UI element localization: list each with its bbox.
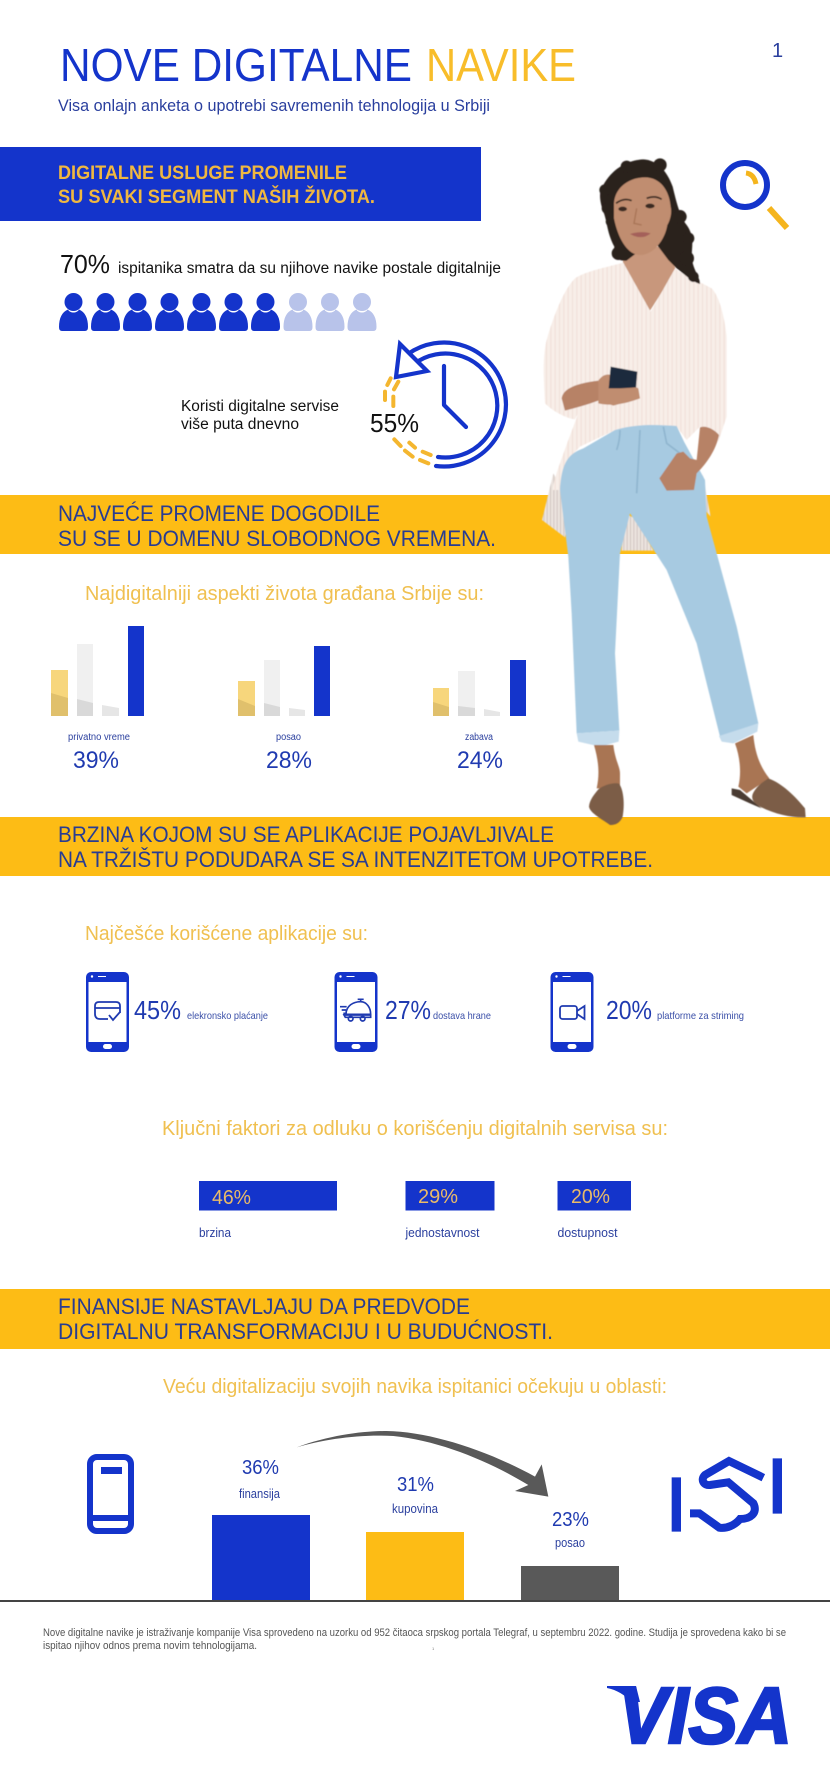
page number: 1 bbox=[772, 40, 783, 62]
right leg bbox=[735, 735, 769, 793]
title: NOVE DIGITALNE bbox=[60, 39, 412, 91]
bar: posao: 23% bbox=[552, 1508, 589, 1531]
bar chart: zabava bbox=[433, 660, 526, 774]
left arm and hand bbox=[562, 381, 600, 411]
app stat: food delivery bbox=[334, 972, 491, 1052]
app stat: streaming: platforme za striming bbox=[657, 1010, 744, 1022]
footnote bbox=[43, 1627, 786, 1652]
right shoe bbox=[752, 778, 806, 817]
bar chart: privatno vreme: 39% bbox=[73, 747, 119, 774]
factor bar: brzina: 46% bbox=[212, 1187, 251, 1209]
app stat: streaming: 20% bbox=[606, 995, 652, 1025]
left leg bbox=[594, 745, 620, 788]
arrow: curved grey bbox=[297, 1431, 548, 1497]
bar: finansija: finansija bbox=[239, 1486, 281, 1501]
bar: kupovina: 31% bbox=[397, 1473, 434, 1496]
axis line bbox=[0, 1600, 830, 1602]
factor bar: dostupnost bbox=[558, 1181, 631, 1240]
stat: 70 percent bbox=[60, 249, 501, 279]
phone bbox=[609, 367, 637, 388]
bar: kupovina: kupovina bbox=[392, 1501, 439, 1516]
icon: handshake bbox=[676, 1458, 777, 1532]
neck bbox=[623, 247, 676, 312]
hair bbox=[599, 158, 700, 284]
bar chart: zabava: zabava bbox=[465, 732, 493, 743]
panel: blue banner bbox=[0, 147, 481, 221]
bar: kupovina bbox=[366, 1473, 464, 1600]
panel: yellow banner 2: BRZINA KOJOM SU SE APLIKACIJE POJAVLJIVALE bbox=[58, 822, 554, 847]
bar chart: posao bbox=[238, 646, 330, 774]
bar chart: zabava: 24% bbox=[457, 747, 503, 774]
icon: phone outline bbox=[90, 1457, 131, 1531]
right shoe sole bbox=[732, 788, 762, 808]
stat: 70 percent: 70% bbox=[60, 249, 110, 279]
jeans cuffs bbox=[577, 731, 619, 747]
panel: yellow banner 2 bbox=[0, 817, 830, 876]
panel: yellow banner 3: DIGITALNU TRANSFORMACIJU I U BUDUĆNOSTI. bbox=[58, 1319, 553, 1344]
factor bar: dostupnost: dostupnost bbox=[558, 1225, 618, 1240]
jeans bbox=[560, 425, 758, 737]
panel: yellow banner 3 bbox=[0, 1289, 830, 1349]
factor bar: brzina bbox=[199, 1181, 337, 1240]
icon: clock with arrow bbox=[385, 343, 506, 467]
app stat: food delivery: dostava hrane bbox=[433, 1010, 491, 1022]
panel: yellow banner 1: NAJVEĆE PROMENE DOGODILE bbox=[58, 501, 380, 526]
bar: finansija bbox=[212, 1456, 310, 1600]
stat: 55 percent: 55% bbox=[370, 408, 419, 438]
app stat: electronic payment: 45% bbox=[134, 995, 181, 1025]
heading: expectations: Veću digitalizaciju svojih navika ispitanici očekuju u oblasti: bbox=[163, 1376, 667, 1398]
bar chart: posao: posao bbox=[276, 732, 301, 743]
heading: most digital aspects: Najdigitalniji aspekti života građana Srbije su: bbox=[85, 583, 484, 605]
bar chart: privatno vreme: privatno vreme bbox=[68, 732, 130, 743]
panel: blue banner: SU SVAKI SEGMENT NAŠIH ŽIVOTA. bbox=[58, 184, 375, 208]
illustration: woman with phone bbox=[542, 158, 806, 825]
panel: yellow banner 1: SU SE U DOMENU SLOBODNOG VREMENA. bbox=[58, 526, 496, 551]
subtitle: Visa onlajn anketa o upotrebi savremenih tehnologija u Srbiji bbox=[58, 97, 490, 115]
shirt bbox=[544, 263, 727, 490]
bar: finansija: 36% bbox=[242, 1456, 279, 1479]
app stat: electronic payment: elekronsko plaćanje bbox=[187, 1010, 268, 1022]
factor bar: jednostavnost: jednostavnost bbox=[405, 1225, 480, 1240]
bar: posao bbox=[521, 1508, 619, 1600]
factor bar: jednostavnost: 29% bbox=[418, 1186, 458, 1208]
bar chart: privatno vreme bbox=[51, 626, 144, 774]
factor bar: dostupnost: 20% bbox=[571, 1186, 610, 1208]
icon: magnifier bbox=[723, 163, 787, 228]
panel: blue banner: DIGITALNE USLUGE PROMENILE bbox=[58, 162, 347, 184]
text: daily use bbox=[181, 398, 339, 433]
heading: most used apps: Najčešće korišćene aplikacije su: bbox=[85, 923, 368, 945]
bar: posao: posao bbox=[555, 1535, 585, 1550]
text: daily use: Koristi digitalne servise bbox=[181, 398, 339, 415]
right arm and hand bbox=[659, 427, 719, 491]
footnote: ispitao njihov odnos prema novim tehnologijama. bbox=[43, 1640, 257, 1652]
app stat: electronic payment bbox=[86, 972, 268, 1052]
panel: yellow banner 2: NA TRŽIŠTU PODUDARA SE SA INTENZITETOM UPOTREBE. bbox=[58, 847, 653, 872]
stat: 70 percent: ispitanika smatra da su njihove navike postale digitalnije bbox=[118, 260, 501, 277]
panel: yellow banner 1 bbox=[0, 495, 830, 554]
factor bar: brzina: brzina bbox=[199, 1225, 232, 1240]
app stat: streaming bbox=[550, 972, 744, 1052]
footnote: 1 bbox=[432, 1646, 435, 1651]
icon row: people 7 of 10 bbox=[59, 293, 376, 331]
app stat: food delivery: 27% bbox=[385, 995, 431, 1025]
title: NAVIKE bbox=[426, 39, 576, 91]
factor bar: jednostavnost bbox=[405, 1181, 494, 1240]
bar chart: posao: 28% bbox=[266, 747, 312, 774]
heading: key factors: Ključni faktori za odluku o korišćenju digitalnih servisa su: bbox=[162, 1118, 668, 1140]
panel: yellow banner 3: FINANSIJE NASTAVLJAJU DA PREDVODE bbox=[58, 1294, 470, 1319]
shirt back flaps bbox=[542, 473, 711, 551]
face bbox=[614, 177, 671, 255]
logo: VISA: VISA bbox=[618, 1671, 792, 1760]
text: daily use: više puta dnevno bbox=[181, 416, 299, 433]
left shoe bbox=[589, 783, 624, 825]
